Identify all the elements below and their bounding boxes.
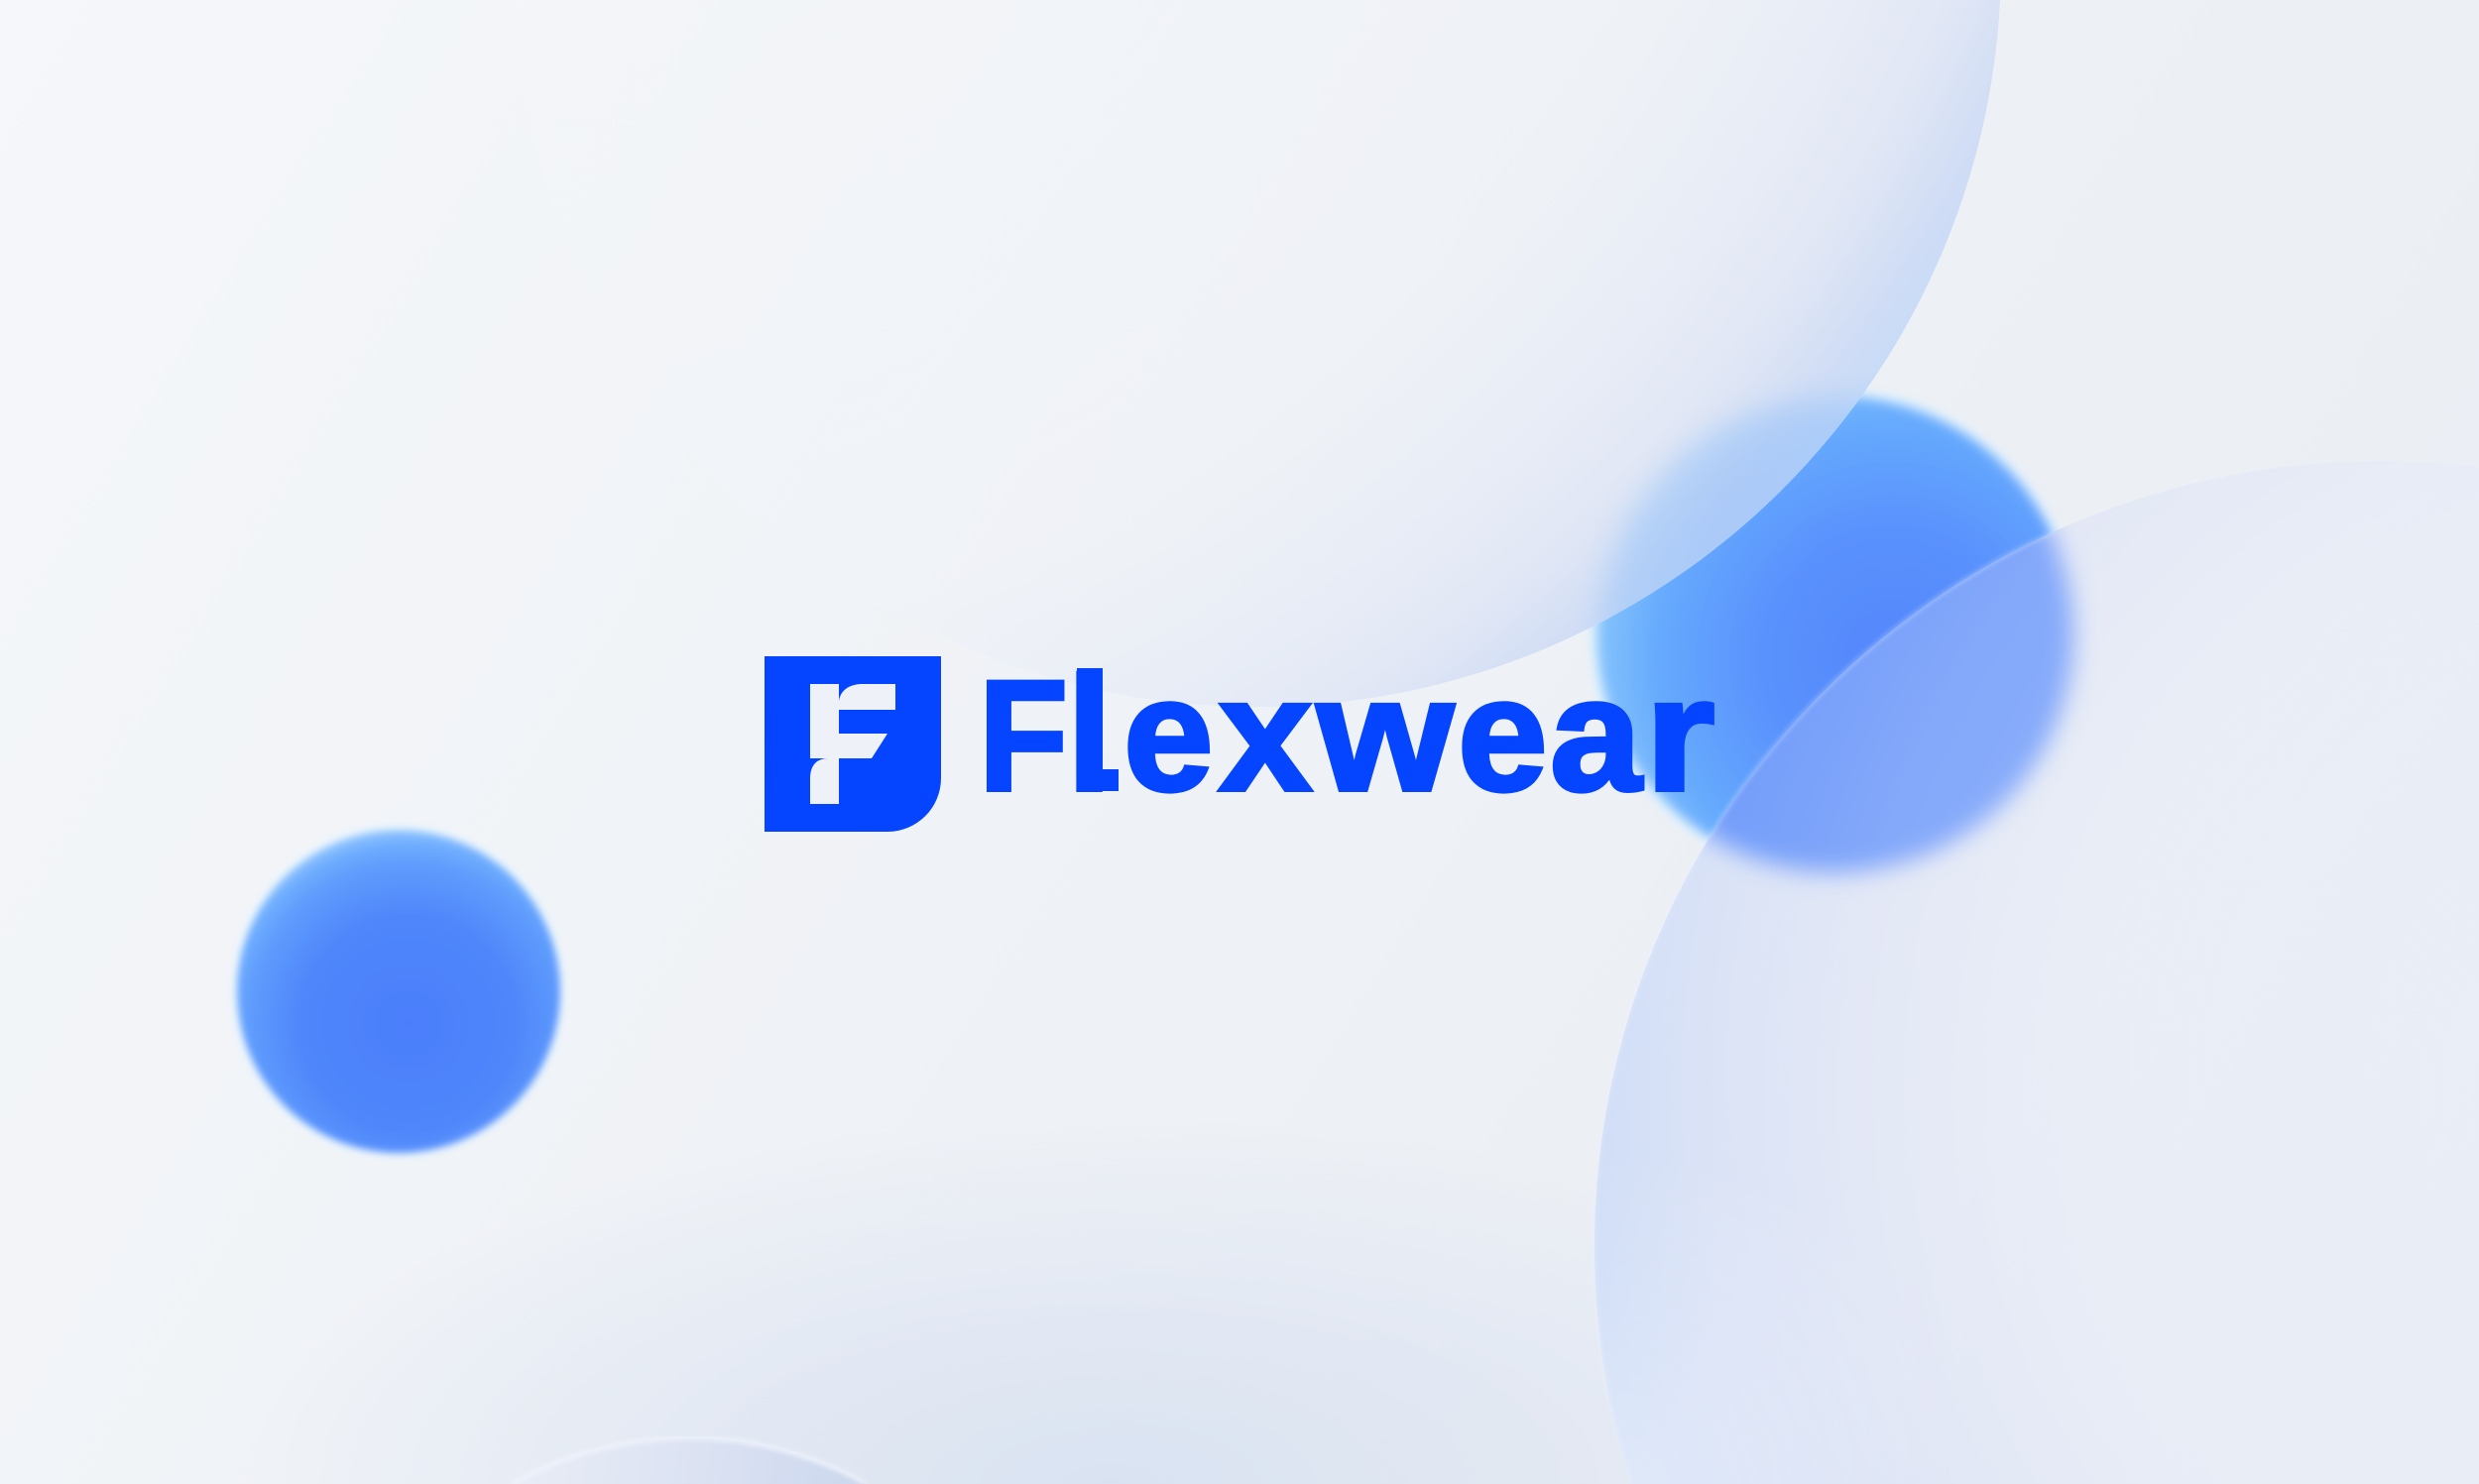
glass disc: top: [1197, 0, 2000, 707]
wordmark: e: [1458, 643, 1548, 825]
wordmark: a: [1550, 643, 1643, 825]
sphere: centre-right blue: [1590, 389, 2081, 880]
wordmark: [979, 643, 1714, 825]
glass disc rim: right: [1594, 531, 2055, 1484]
wordmark: e: [1123, 643, 1214, 825]
wordmark: w: [1316, 643, 1455, 825]
wordmark: l: [1067, 643, 1112, 825]
sphere: left blue: [232, 825, 565, 1158]
logo mark: [765, 656, 941, 832]
wordmark: r: [1645, 643, 1714, 825]
wordmark: l foot: [1077, 668, 1119, 791]
logo mark: letter F: [810, 684, 895, 804]
wordmark: F: [979, 647, 1068, 824]
wordmark: x: [1219, 643, 1312, 825]
glass disc: right: [1594, 507, 2116, 1484]
glass disc: bottom: [512, 1438, 866, 1484]
